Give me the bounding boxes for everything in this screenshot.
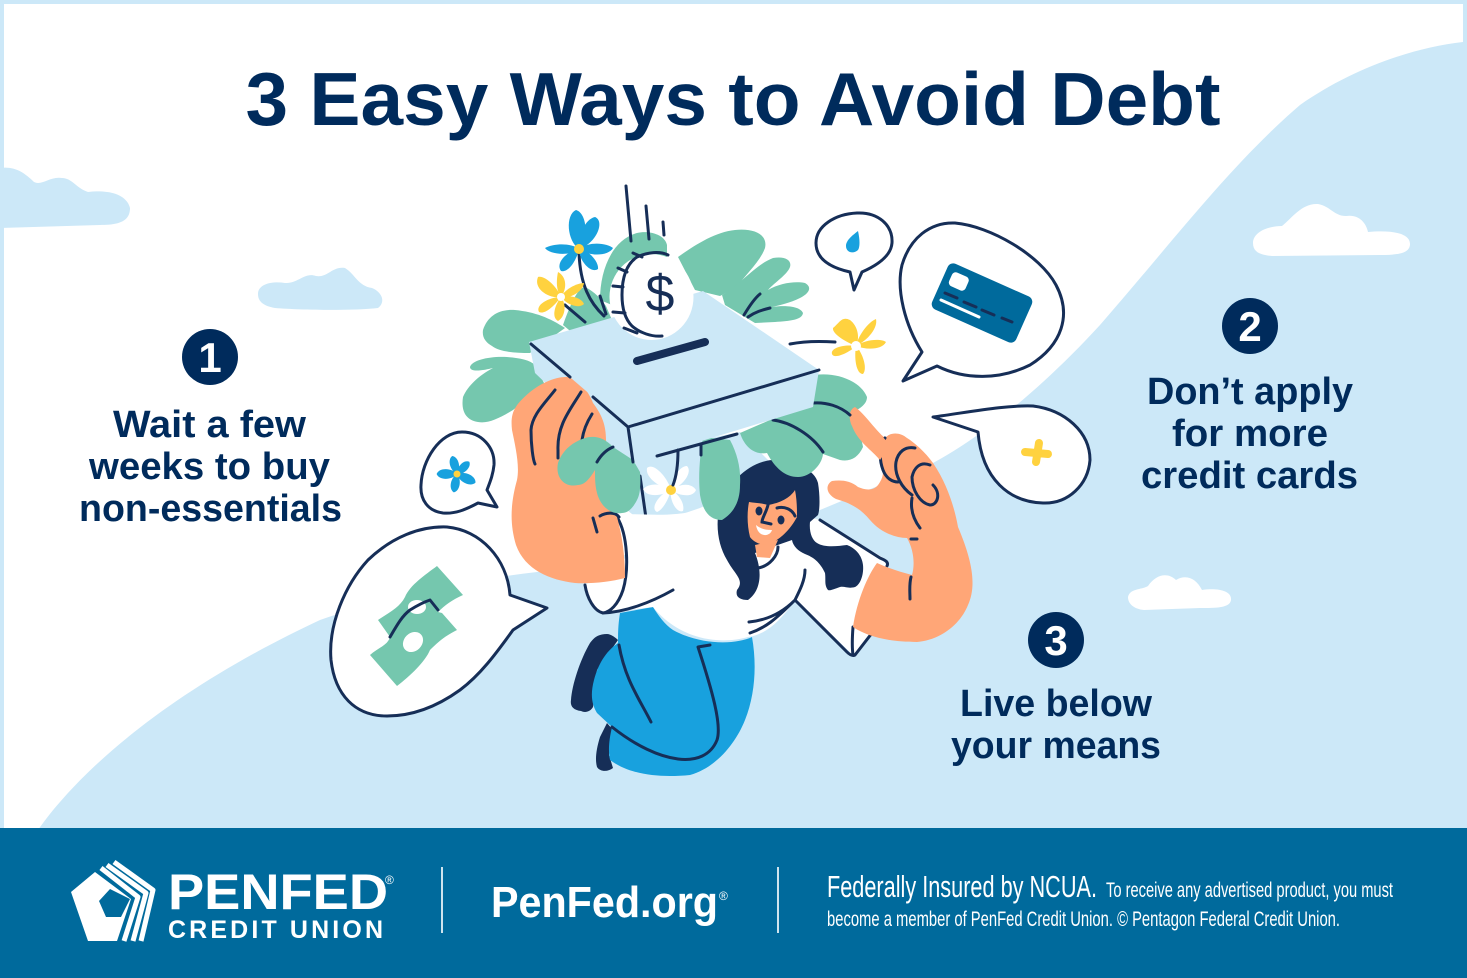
right hand and arm: [827, 407, 973, 642]
flower: blue: [545, 210, 613, 271]
icon: blue flower: [437, 455, 478, 493]
step 1 text: non-essentials: [79, 488, 342, 530]
number badge 2: [1222, 298, 1278, 354]
step 1 text: [79, 404, 342, 530]
leaf veins top right: [744, 294, 770, 317]
box top: [529, 291, 819, 427]
leaf tall centre: [699, 437, 740, 520]
step 1: [79, 329, 342, 530]
face details: [756, 505, 795, 568]
flower stems: [565, 252, 835, 344]
website: PenFed.org: [491, 878, 718, 927]
flower: yellow right: [832, 319, 886, 374]
right hand lines: [880, 438, 938, 599]
box underside: [627, 432, 778, 526]
title: 3 Easy Ways to Avoid Debt: [246, 57, 1221, 141]
speech bubble: credit card: [900, 223, 1064, 381]
PenFed logo: PENFED: [168, 864, 388, 920]
speech bubble: water drop: [816, 213, 892, 290]
shoes: [571, 634, 618, 712]
footer: [0, 828, 1467, 978]
finger over leaf: [850, 407, 890, 460]
leaf cluster left: [557, 437, 640, 513]
step 2 text: [1141, 371, 1358, 497]
PenFed logo: [71, 862, 394, 944]
step 1 text: Wait a few: [113, 404, 306, 446]
leaves behind box: [463, 230, 809, 422]
disclosure text: Federally Insured by NCUA.: [827, 869, 1097, 904]
falling coin: [610, 186, 694, 340]
step 3 text: Live below: [960, 683, 1152, 725]
number badge 2: 2: [1238, 303, 1262, 350]
icon: credit card: [930, 261, 1034, 345]
speech bubble: yellow plus: [933, 406, 1090, 503]
box left side: [529, 342, 633, 462]
cloud: lower right: [1128, 575, 1231, 610]
cloud: far left: [0, 168, 130, 228]
icon: yellow plus: [1025, 443, 1048, 462]
torso: [585, 510, 795, 640]
cloud: left middle: [258, 268, 382, 310]
step 3 text: your means: [951, 725, 1161, 767]
speech bubble: blue flower: [421, 432, 497, 513]
leaf cluster right: [740, 374, 867, 477]
box lines: [531, 344, 819, 462]
divider: [441, 867, 443, 933]
illustration: woman holding box: [463, 186, 973, 776]
hair: [718, 460, 863, 600]
step 3 text: [951, 683, 1161, 767]
number badge 3: [1028, 612, 1084, 668]
number badge 1: 1: [198, 334, 222, 381]
cloud: upper right: [1253, 204, 1410, 256]
right sleeve: [760, 515, 888, 655]
left hand: [512, 377, 625, 583]
flower: yellow left: [537, 272, 584, 321]
icon: banknotes: [370, 566, 463, 686]
face: [748, 490, 797, 545]
coin slot: [637, 342, 705, 361]
neck: [755, 540, 778, 558]
step 3: [951, 612, 1161, 767]
website: ®: [719, 889, 728, 903]
step 1 text: weeks to buy: [88, 446, 330, 488]
step 2 text: for more: [1172, 413, 1328, 455]
PenFed logo: ®: [385, 873, 394, 887]
number badge 3: 3: [1044, 617, 1068, 664]
PenFed logo: CREDIT UNION: [168, 916, 383, 944]
disclosure text: [827, 869, 1393, 931]
pants: [592, 607, 755, 776]
speech bubble: money: [331, 527, 547, 716]
sleeve lines: [585, 517, 805, 633]
box right side: [628, 370, 819, 462]
leaf veins: [597, 403, 850, 462]
flower: white daisy: [643, 466, 696, 512]
step 2 text: Don’t apply: [1147, 371, 1353, 413]
step 2: [1141, 298, 1358, 497]
falling coin: $: [646, 265, 675, 323]
icon: water drop: [846, 231, 860, 252]
logo mark: [71, 862, 153, 941]
number badge 1: [182, 329, 238, 385]
divider: [777, 867, 779, 933]
step 2 text: credit cards: [1141, 455, 1358, 497]
leaves in front: [557, 374, 867, 520]
left hand lines: [531, 390, 619, 532]
pants lines: [612, 645, 718, 759]
